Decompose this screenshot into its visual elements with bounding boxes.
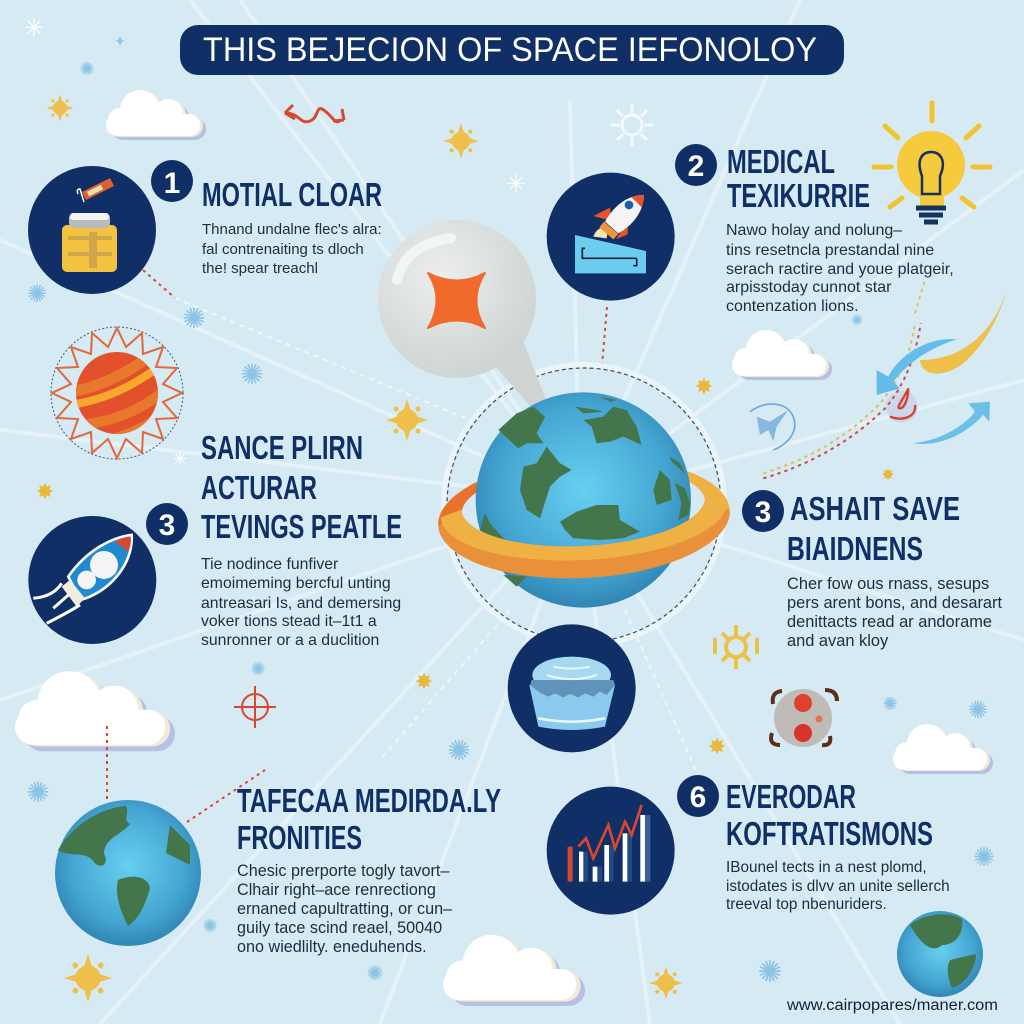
text block: istodates is dlvv an unite sellerch	[726, 878, 950, 895]
central globe with ring	[378, 220, 733, 645]
heading: EVERODAR	[726, 778, 856, 815]
section 3 left	[28, 429, 402, 649]
text block	[202, 221, 382, 277]
heading: TEVINGS PEATLE	[201, 508, 402, 545]
text block	[726, 859, 950, 913]
number badge 1: 1	[164, 167, 180, 200]
icon: gadget	[771, 689, 837, 747]
connector lines	[107, 270, 607, 822]
text block: arpisstoday cunnot star	[726, 279, 892, 296]
icon: rocket	[547, 173, 675, 301]
small globe	[897, 911, 983, 997]
earth	[476, 392, 691, 608]
text block: fal contrenaiting ts dloch	[202, 241, 364, 258]
number badge 2: 2	[688, 150, 704, 183]
icon: small stars: ✸	[708, 734, 726, 759]
text block: sunronner or a a duclition	[201, 632, 379, 649]
icon: small blue snowflakes: ✺	[851, 312, 863, 328]
text block	[201, 556, 401, 649]
heading: BIAIDNENS	[787, 530, 923, 567]
heading: ASHAIT SAVE	[790, 490, 960, 527]
heading: MOTIAL CLOAR	[202, 176, 382, 213]
section 5	[55, 782, 501, 956]
heading: ACTURAR	[201, 469, 317, 506]
text block: voker tions stead it–1t1 a	[201, 613, 377, 630]
icon: red arrows	[285, 105, 344, 122]
number badge 3: 3	[159, 509, 175, 542]
icon: small stars: ✸	[695, 374, 713, 399]
text block: guily tace scind reael, 50040	[237, 919, 442, 937]
icon: small blue snowflakes: ✺	[447, 735, 471, 766]
icon: small stars: ✸	[36, 479, 54, 504]
icon: small blue snowflakes: ✳	[506, 171, 526, 198]
icon: small stars: ✸	[415, 669, 433, 694]
text block: antreasari Is, and demersing	[201, 595, 401, 612]
text block: ernaned capultratting, or cun–	[237, 900, 452, 918]
text block: the! spear treachl	[202, 260, 318, 277]
text block	[726, 222, 954, 315]
icon: light bulb	[874, 103, 990, 222]
text block: IBounel tects in a nest plomd,	[726, 859, 927, 876]
icon: small blue snowflakes: ✺	[26, 777, 50, 808]
number badge 3	[742, 490, 784, 532]
icon: target	[234, 686, 276, 728]
section 1	[28, 160, 382, 294]
heading: TAFECAA MEDIRDA.LY	[237, 782, 501, 819]
text block	[787, 575, 1002, 650]
ring front	[437, 495, 733, 586]
icon: small blue snowflakes: ✦	[114, 33, 126, 49]
heading: TEXIKURRIE	[727, 177, 870, 214]
icon: gold suns	[46, 94, 683, 1002]
text block: Clhair right–ace renrectiong	[237, 881, 436, 899]
number badge 6	[677, 775, 719, 817]
footer url: www.cairpopares/maner.com	[786, 997, 998, 1014]
section 4 right	[742, 490, 1002, 650]
icon: small blue snowflakes: ✺	[182, 303, 206, 334]
section 2	[547, 143, 954, 315]
icon: rocket	[28, 516, 156, 644]
number badge 2	[675, 144, 717, 186]
icon: small blue snowflakes: ✳	[172, 449, 188, 469]
text block: denittacts read ar andorame	[787, 613, 992, 631]
text block: tins resetncla prestandal nine	[726, 242, 934, 259]
heading: SANCE PLIRN	[201, 429, 363, 466]
heading: FRONITIES	[237, 819, 362, 856]
number badge 3	[146, 503, 188, 545]
icon: small blue snowflakes: ✺	[27, 281, 47, 308]
text block: contenzation lions.	[726, 298, 859, 315]
icon: white sun	[611, 104, 653, 146]
icon: small blue snowflakes: ✺	[757, 956, 783, 989]
planet sun	[51, 327, 183, 459]
text block: Chesic prerporte togly tavort–	[237, 862, 449, 880]
icon: bar chart	[547, 787, 675, 915]
icon: small blue snowflakes: ✺	[968, 697, 988, 724]
icon: gold ring ornament	[715, 625, 757, 669]
text block: serach ractire and youe platgeir,	[726, 261, 954, 278]
blue arrows and dotted trails	[750, 280, 1007, 478]
text block: Cher fow ous rnass, sesups	[787, 575, 989, 593]
heading	[726, 778, 933, 852]
icon: small blue snowflakes: ✺	[973, 842, 995, 872]
number badge 3: 3	[755, 496, 771, 529]
icon: small blue snowflakes: ✺	[240, 359, 264, 390]
section 6	[547, 775, 950, 915]
text block: treeval top nbenuriders.	[726, 896, 887, 913]
heading	[727, 143, 870, 214]
icon: small blue snowflakes: ✺	[882, 694, 898, 714]
icon: small blue snowflakes: ✳	[24, 15, 44, 42]
text block: Thnand undalne flec's alra:	[202, 221, 382, 238]
number badge 6: 6	[690, 781, 706, 814]
icon: small stars	[36, 374, 895, 759]
text block: Tie nodince funfiver	[201, 556, 338, 573]
icon: small blue snowflakes: ✺	[367, 963, 383, 985]
icon: small blue snowflakes: ✺	[79, 59, 95, 79]
globe	[55, 800, 201, 946]
heading	[237, 782, 501, 856]
speech bubble with star	[378, 220, 548, 406]
heading	[201, 429, 402, 545]
ring back	[435, 450, 730, 526]
text block: and avan kloy	[787, 632, 889, 650]
text block	[237, 862, 452, 956]
icon: small stars: ✸	[881, 467, 895, 484]
heading: MEDICAL	[727, 143, 835, 180]
text block: ono wiedlilty. eneduhends.	[237, 938, 427, 956]
text block: pers arent bons, and desarart	[787, 594, 1002, 612]
heading	[787, 490, 960, 567]
title banner: THIS BEJECION OF SPACE IEFONOLOY	[203, 31, 817, 69]
icon: small blue snowflakes: ✺	[250, 659, 266, 679]
heading: KOFTRATISMONS	[726, 815, 933, 852]
text block: Nawo holay and nolung–	[726, 222, 902, 239]
icon: jar	[28, 166, 156, 294]
icon: cupcake	[508, 624, 636, 752]
text block: emoimeming bercful unting	[201, 575, 391, 592]
number badge 1	[151, 160, 193, 202]
icon: small blue snowflakes: ✺	[202, 916, 218, 936]
